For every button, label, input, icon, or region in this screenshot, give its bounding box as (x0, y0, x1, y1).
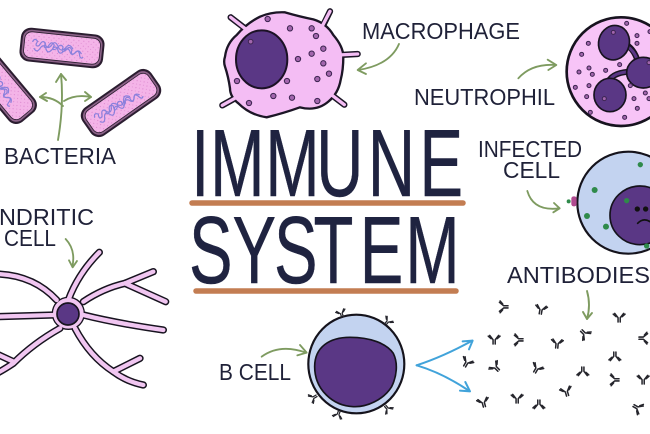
panel: b cell (219, 308, 473, 419)
label: infected cell: INFECTED (478, 136, 582, 162)
panel: neutrophil (414, 17, 650, 126)
label: infected cell: CELL (503, 157, 560, 183)
heading: immune: M (210, 111, 264, 217)
arrow: antibodies pointer (583, 291, 592, 319)
heading: system: Y (233, 198, 276, 304)
panel: bacteria (0, 27, 165, 169)
heading: system: E (360, 198, 403, 304)
label: b cell: B CELL (219, 359, 291, 385)
label: dendritic cell: NDRITIC (0, 204, 94, 230)
label: neutrophil: NEUTROPHIL (414, 84, 555, 110)
arrow: differentiation to antibodies (417, 341, 473, 391)
arrow: bacteria pointers (40, 74, 91, 140)
heading: system: T (313, 198, 353, 304)
heading: system: M (405, 198, 460, 304)
icon: b cell (308, 315, 404, 413)
divider: upper rule (192, 200, 463, 206)
title: immune system (189, 111, 463, 304)
heading: immune: I (191, 111, 209, 217)
icon: bacterium left (0, 42, 41, 128)
label: dendritic cell (0, 204, 94, 251)
arrow: infected cell pointer (527, 191, 560, 212)
label: infected cell (478, 136, 582, 183)
label: antibodies: ANTIBODIES (507, 262, 650, 288)
heading: immune: E (420, 111, 463, 217)
icon: neutrophil cell (567, 17, 650, 126)
heading: immune: N (368, 111, 415, 217)
icon: bacterium right (77, 65, 165, 141)
icon: surface receptors (308, 308, 394, 419)
arrow: dendritic pointer (66, 239, 77, 267)
arrow: b cell pointer (262, 345, 307, 357)
icon: free antibodies (459, 301, 649, 415)
panel: macrophage (222, 11, 520, 117)
icon: dendritic cell (0, 252, 166, 385)
divider: lower rule (196, 288, 456, 294)
icon: bacterium top (18, 27, 106, 69)
panel: antibodies (459, 262, 650, 415)
icon: macrophage cell (222, 11, 358, 117)
icon: infected cell (567, 152, 650, 254)
heading: immune: U (316, 111, 363, 217)
label: macrophage: MACROPHAGE (362, 18, 520, 44)
label: bacteria: BACTERIA (4, 143, 117, 169)
heading: system: S (189, 198, 233, 304)
heading: system: S (274, 198, 318, 304)
arrow: macrophage pointer (358, 44, 399, 74)
panel: infected cell (478, 136, 650, 254)
heading: immune: M (265, 111, 320, 217)
arrow: neutrophil pointer (518, 60, 556, 78)
panel: dendritic cell (0, 204, 166, 385)
label: dendritic cell: CELL (4, 225, 56, 251)
